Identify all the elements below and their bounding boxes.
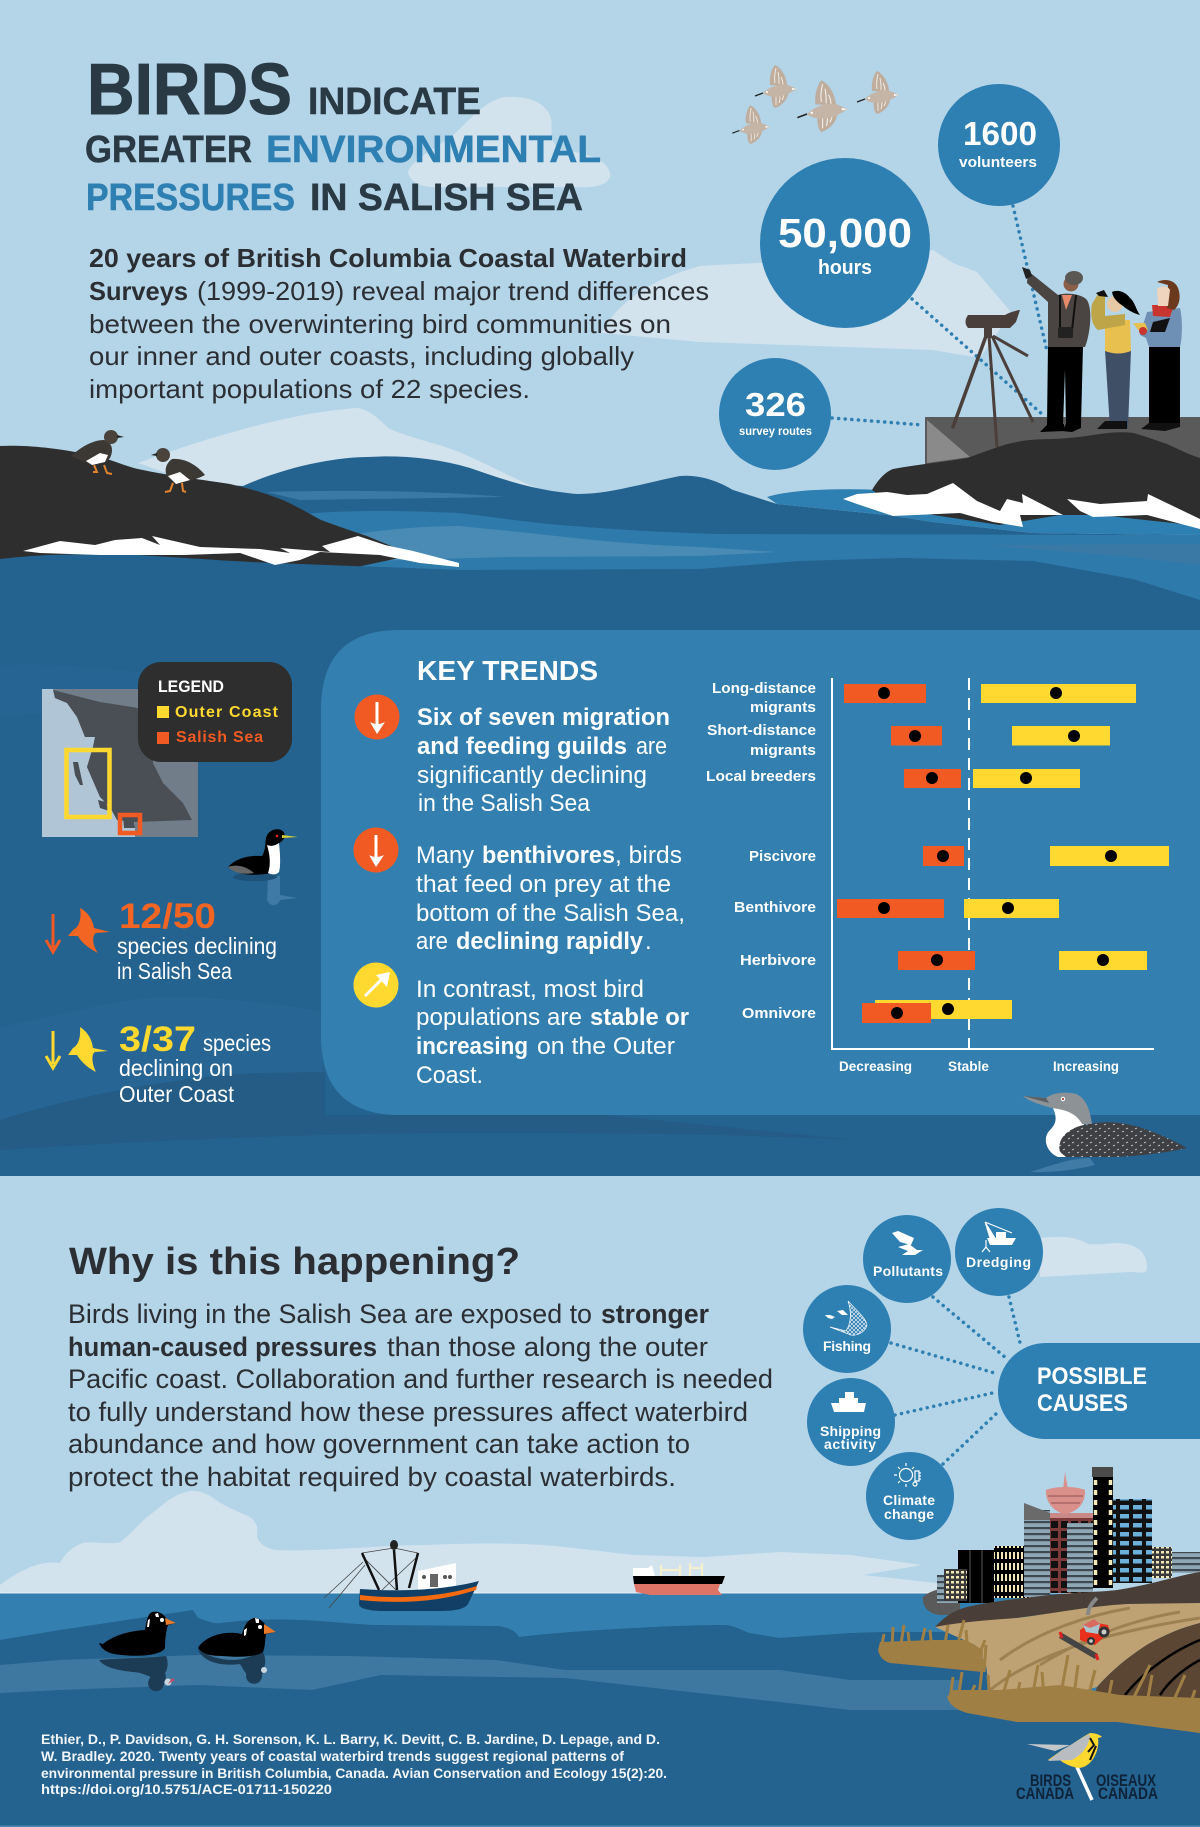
- tan field: [935, 1603, 1200, 1705]
- chart row: omnivore: Omnivore: [742, 1005, 816, 1022]
- trend 1 text: significantly declining: [417, 762, 647, 789]
- trend 1 text: in the Salish Sea: [418, 790, 591, 817]
- trend 3 text: Coast.: [416, 1062, 483, 1089]
- flying shorebirds: [732, 65, 899, 144]
- why paragraph: than those along the outer: [387, 1332, 708, 1362]
- cause: shipping activity: [807, 1378, 895, 1466]
- possible causes label: CAUSES: [1037, 1390, 1128, 1417]
- chart row: long-distance migrants: migrants: [750, 699, 816, 716]
- surf foam left: [23, 536, 459, 567]
- turnstone bird 2: [151, 448, 205, 492]
- grebe illustration: [228, 829, 298, 905]
- trend 2 icon: down arrow: [354, 828, 398, 872]
- stat: 326 survey routes: [719, 358, 831, 470]
- title: GREATER: [85, 129, 252, 171]
- stat: 50,000 hours: 50,000: [778, 210, 912, 256]
- why paragraph: stronger: [601, 1299, 709, 1329]
- trend 2 text: .: [645, 928, 652, 955]
- cause: pollutants: Pollutants: [873, 1263, 943, 1279]
- title: ENVIRONMENTAL: [266, 129, 601, 171]
- right rock with surf: [843, 432, 1200, 529]
- volunteer pointing: [1022, 267, 1090, 432]
- chart row: piscivore: Piscivore: [749, 848, 816, 865]
- stat: 12 of 50 species declining in Salish Sea: 12/50: [119, 897, 216, 936]
- intro paragraph: our inner and outer coasts, including globally: [89, 341, 634, 371]
- trend 3 text: In contrast, most bird: [416, 976, 644, 1003]
- chart axis labels: Increasing: [1053, 1058, 1119, 1074]
- trend 3 text: on the Outer: [537, 1033, 675, 1060]
- icon: container ship: [831, 1392, 866, 1412]
- cause: shipping activity: activity: [824, 1436, 876, 1452]
- Birds Canada logo: OISEAUX: [1096, 1771, 1157, 1790]
- trend 3 text: increasing: [416, 1033, 528, 1060]
- intro paragraph: Surveys: [89, 276, 188, 306]
- why is this happening heading: Why is this happening?: [69, 1241, 520, 1283]
- citation: [41, 1732, 667, 1797]
- stat: 12 of 50 species declining in Salish Sea: in Salish Sea: [117, 958, 232, 984]
- icon: pollutant spill: [892, 1231, 923, 1255]
- trend 2 text: [416, 842, 685, 955]
- chart row: local breeders: [706, 768, 1080, 788]
- title: BIRDS: [87, 50, 292, 130]
- background sky: [0, 0, 1200, 640]
- citation: environmental pressure in British Columbia, Canada. Avian Conservation and Ecology 15(2):20.: [41, 1766, 667, 1781]
- cloud right of text: [601, 250, 1010, 358]
- intro paragraph: 20 years of British Columbia Coastal Waterbird: [89, 243, 687, 273]
- legend: Outer Coast: [175, 704, 279, 721]
- marsh grass: [878, 1620, 1200, 1733]
- Vancouver skyline: [923, 1467, 1200, 1615]
- cloud behind title: [408, 97, 610, 187]
- panel: key trends: [321, 630, 1200, 1115]
- intro paragraph: [89, 243, 709, 404]
- left rock with surf: [0, 446, 459, 600]
- icon: dredging ship: [982, 1222, 1016, 1252]
- title: INDICATE: [308, 81, 481, 123]
- stat: 326 survey routes: survey routes: [739, 424, 812, 438]
- trend 1 text: [417, 704, 670, 817]
- intro paragraph: important populations of 22 species.: [89, 374, 530, 404]
- Birds Canada logo: BIRDS: [1030, 1771, 1071, 1790]
- why paragraph: human-caused pressures: [68, 1332, 377, 1362]
- chart axis labels: Decreasing: [839, 1058, 912, 1074]
- why paragraph: Birds living in the Salish Sea are exposed to: [68, 1299, 592, 1329]
- icon: yellow bird silhouette: [68, 1027, 108, 1072]
- surf scoter 2: [198, 1618, 276, 1684]
- Birds Canada logo: CANADA: [1098, 1784, 1158, 1803]
- Birds Canada logo: CANADA: [1016, 1784, 1074, 1803]
- map of British Columbia: [42, 689, 198, 837]
- why paragraph: Pacific coast. Collaboration and further research is needed: [68, 1364, 773, 1394]
- chart row: benthivore: [734, 899, 1059, 918]
- trend 3 icon: up arrow: [354, 962, 398, 1008]
- stat: 1600 volunteers: volunteers: [959, 154, 1037, 171]
- bottom section sky: [0, 1176, 1200, 1593]
- dark hill: [935, 1572, 1200, 1627]
- trend 2 text: benthivores: [482, 842, 615, 869]
- large cloud on horizon: [0, 1491, 950, 1593]
- chart row: herbivore: Herbivore: [740, 952, 816, 969]
- trend 3 text: populations are: [416, 1004, 582, 1031]
- stat: 12 of 50 species declining in Salish Sea: [46, 897, 277, 984]
- trend 2 text: that feed on prey at the: [416, 871, 671, 898]
- stat: 3 of 37 species declining on Outer Coast: declining on: [119, 1055, 233, 1081]
- stat: 3 of 37 species declining on Outer Coast: species: [203, 1030, 271, 1056]
- why paragraph: to fully understand how these pressures affect waterbird: [68, 1397, 748, 1427]
- cloud above waves: [138, 408, 597, 500]
- possible causes label: POSSIBLE: [1037, 1363, 1147, 1390]
- why paragraph: abundance and how government can take action to: [68, 1429, 690, 1459]
- cause: dredging: [955, 1208, 1043, 1296]
- cause: climate change: [866, 1452, 954, 1540]
- chart row: short-distance migrants: [707, 722, 1110, 759]
- cause: fishing: [803, 1285, 891, 1373]
- chart row: local breeders: Local breeders: [706, 768, 816, 785]
- cause: fishing: Fishing: [823, 1338, 871, 1354]
- sea top section: [0, 456, 1200, 600]
- intro paragraph: between the overwintering bird communities on: [89, 309, 671, 339]
- surf foam right: [843, 483, 1200, 529]
- dotted connector lines to survey team: [832, 206, 1047, 425]
- bottom sea: [0, 1592, 1200, 1827]
- trend 2 text: Many: [416, 842, 474, 869]
- cause: pollutants: [863, 1215, 951, 1303]
- spotting scope on tripod: [953, 310, 1033, 447]
- turnstone bird 1: [71, 430, 124, 474]
- chart axis labels: Stable: [948, 1058, 989, 1074]
- volunteer with binoculars: [1091, 290, 1140, 429]
- mid section water: [0, 600, 1200, 1177]
- stat: 3 of 37 species declining on Outer Coast: Outer Coast: [119, 1081, 235, 1107]
- trend 3 text: [416, 976, 689, 1089]
- volunteer with notebook: [1133, 280, 1182, 431]
- stat: 1600 volunteers: 1600: [963, 115, 1037, 152]
- trend 2 text: are: [416, 928, 448, 955]
- legend: LEGEND: [158, 677, 224, 696]
- trend 2 text: declining rapidly: [456, 928, 644, 955]
- chart row: short-distance migrants: migrants: [750, 742, 816, 759]
- chart row: herbivore: [740, 951, 1147, 970]
- cause: climate change: Climate: [883, 1492, 935, 1508]
- stat: 50,000 hours: [760, 158, 930, 328]
- stat: 3 of 37 species declining on Outer Coast: [46, 1020, 271, 1107]
- icon: yellow arrow: [46, 1031, 60, 1068]
- icon: orange arrow: [46, 914, 60, 952]
- cause: dredging: Dredging: [966, 1254, 1031, 1270]
- stat: 1600 volunteers: [938, 84, 1060, 206]
- trend 1 text: are: [636, 733, 667, 760]
- title: IN SALISH SEA: [310, 177, 583, 219]
- intro paragraph: (1999-2019) reveal major trend differences: [197, 276, 709, 306]
- trend 1 text: Six of seven migration: [417, 704, 670, 731]
- surf scoter 1: [99, 1612, 176, 1691]
- chart row: piscivore: [749, 846, 1169, 866]
- chart row: omnivore: [742, 1000, 1012, 1023]
- possible causes label: [998, 1343, 1200, 1439]
- trend 2 text: , birds: [615, 842, 682, 869]
- title: [85, 50, 601, 219]
- fishing boat: [324, 1540, 479, 1611]
- title: PRESSURES: [86, 177, 295, 219]
- observation platform: [925, 417, 1200, 467]
- citation: W. Bradley. 2020. Twenty years of coastal waterbird trends suggest regional patterns of: [41, 1749, 625, 1764]
- key trends heading: KEY TRENDS: [417, 655, 598, 686]
- chart row: long-distance migrants: [712, 680, 1136, 716]
- legend: Salish Sea: [176, 729, 263, 746]
- chart row: short-distance migrants: Short-distance: [707, 722, 816, 739]
- tractor: [1059, 1598, 1110, 1660]
- stat: 326 survey routes: 326: [745, 386, 806, 423]
- legend: [138, 662, 292, 762]
- trend chart: [706, 678, 1169, 1074]
- citation: Ethier, D., P. Davidson, G. H. Sorenson, K. L. Barry, K. Devitt, C. B. Jardine, D. Lepage, and D.: [41, 1732, 660, 1747]
- Birds Canada logo: [1016, 1733, 1158, 1803]
- icon: fish and net: [825, 1301, 867, 1335]
- stat: 50,000 hours: hours: [818, 257, 872, 279]
- stat: 12 of 50 species declining in Salish Sea: species declining: [117, 933, 277, 959]
- trend 3 text: stable or: [590, 1004, 689, 1031]
- cause: climate change: change: [884, 1506, 934, 1522]
- why paragraph: [68, 1299, 773, 1492]
- cloud behind dredging circle: [1040, 1237, 1147, 1277]
- chart row: benthivore: Benthivore: [734, 899, 816, 916]
- dotted connector lines to causes: [891, 1297, 1021, 1464]
- cargo ship: [633, 1563, 725, 1595]
- trend 2 text: bottom of the Salish Sea,: [416, 900, 685, 927]
- stat: 3 of 37 species declining on Outer Coast: 3/37: [119, 1020, 196, 1059]
- citation: https://doi.org/10.5751/ACE-01711-150220: [41, 1782, 332, 1797]
- trend 1 icon: down arrow: [354, 694, 400, 740]
- farmland shore: [878, 1572, 1200, 1733]
- loon illustration: [1023, 1093, 1187, 1172]
- plowed field: [1090, 1623, 1200, 1717]
- trend 1 text: and feeding guilds: [417, 733, 627, 760]
- icon: sun and thermometer: [894, 1463, 921, 1487]
- icon: orange bird silhouette: [68, 908, 110, 953]
- chart row: long-distance migrants: Long-distance: [712, 680, 816, 697]
- cause: shipping activity: Shipping: [820, 1423, 881, 1439]
- why paragraph: protect the habitat required by coastal waterbirds.: [68, 1462, 676, 1492]
- chart axis labels: [839, 1058, 1119, 1074]
